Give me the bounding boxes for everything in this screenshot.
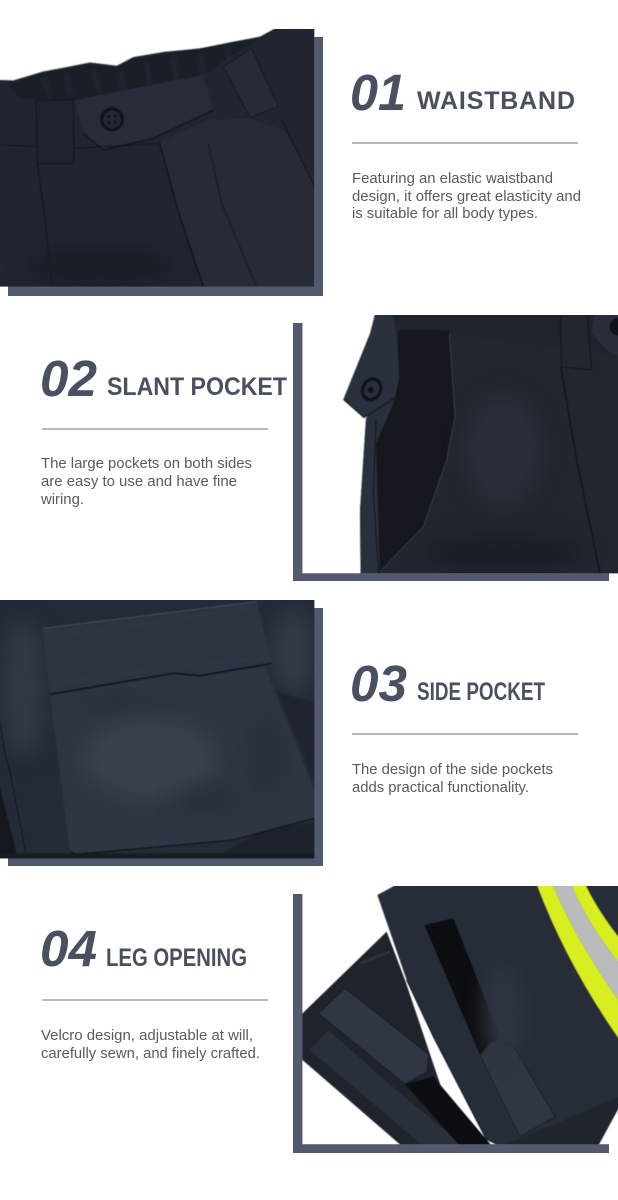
velcro tab upper — [480, 1041, 555, 1137]
flap — [43, 602, 272, 694]
backing frame: leg opening — [293, 894, 609, 1153]
photo: slant pocket close-up — [302, 315, 618, 574]
body text: design, it offers great elasticity and — [352, 188, 581, 205]
lower tab — [318, 988, 428, 1084]
body text: Featuring an elastic waistband — [352, 170, 553, 187]
body text: The design of the side pockets — [352, 761, 553, 778]
body text: carefully sewn, and finely crafted. — [41, 1045, 260, 1062]
waistband strip — [445, 330, 449, 332]
body text: are easy to use and have fine — [41, 473, 237, 490]
front panel — [373, 333, 618, 582]
top-right flap — [592, 315, 618, 354]
panel: slant pocket photo with backing frame — [293, 315, 618, 581]
heading: waistband: WAISTBAND — [417, 87, 575, 115]
upper leg — [377, 880, 618, 1152]
velcro strip upper — [424, 918, 500, 1055]
section text: 02 slant pocket — [40, 350, 287, 508]
seams and fly — [159, 118, 322, 295]
photo: leg opening close-up — [302, 886, 618, 1144]
backing frame: side pocket — [8, 608, 323, 866]
number 01: 01 — [350, 64, 406, 121]
pocket interior — [376, 330, 455, 572]
photo: waistband close-up — [0, 29, 314, 287]
lower leg — [302, 931, 448, 1144]
velcro strip lower — [406, 1076, 492, 1144]
body text — [352, 761, 553, 796]
number 02: 02 — [40, 350, 97, 407]
backing frame: waistband — [8, 37, 323, 296]
side panel — [360, 400, 393, 582]
section text: 03 side pocket — [350, 655, 578, 796]
seams — [561, 367, 602, 582]
body text — [40, 455, 252, 508]
heading: leg opening: LEG OPENING — [106, 944, 247, 972]
panel: waistband photo with backing frame — [0, 29, 323, 296]
elastic band shading — [196, 48, 205, 50]
panel: leg opening photo with backing frame — [293, 886, 618, 1153]
backing frame: slant pocket — [293, 323, 609, 581]
body text: is suitable for all body types. — [352, 205, 538, 222]
body text: The large pockets on both sides — [41, 455, 252, 472]
body text: wiring. — [40, 491, 84, 508]
hanging flap — [343, 310, 399, 418]
pocket body — [50, 667, 322, 854]
belt loop — [560, 310, 592, 370]
button — [360, 377, 383, 402]
belt loops — [36, 100, 74, 163]
reflective stripes — [536, 886, 618, 1039]
flap — [75, 75, 213, 150]
panel: side pocket photo with backing frame — [0, 600, 323, 866]
heading: side pocket: SIDE POCKET — [417, 678, 545, 706]
photo: side pocket close-up — [0, 600, 314, 858]
body text: Velcro design, adjustable at will, — [41, 1027, 253, 1044]
section text: 01 waistband — [350, 64, 581, 222]
body text — [41, 1027, 260, 1062]
body text — [352, 170, 581, 222]
number 03: 03 — [350, 655, 407, 712]
body text: adds practical functionality. — [352, 779, 529, 796]
number 04: 04 — [40, 920, 97, 977]
section text: 04 leg opening — [40, 920, 268, 1062]
button — [100, 107, 124, 131]
